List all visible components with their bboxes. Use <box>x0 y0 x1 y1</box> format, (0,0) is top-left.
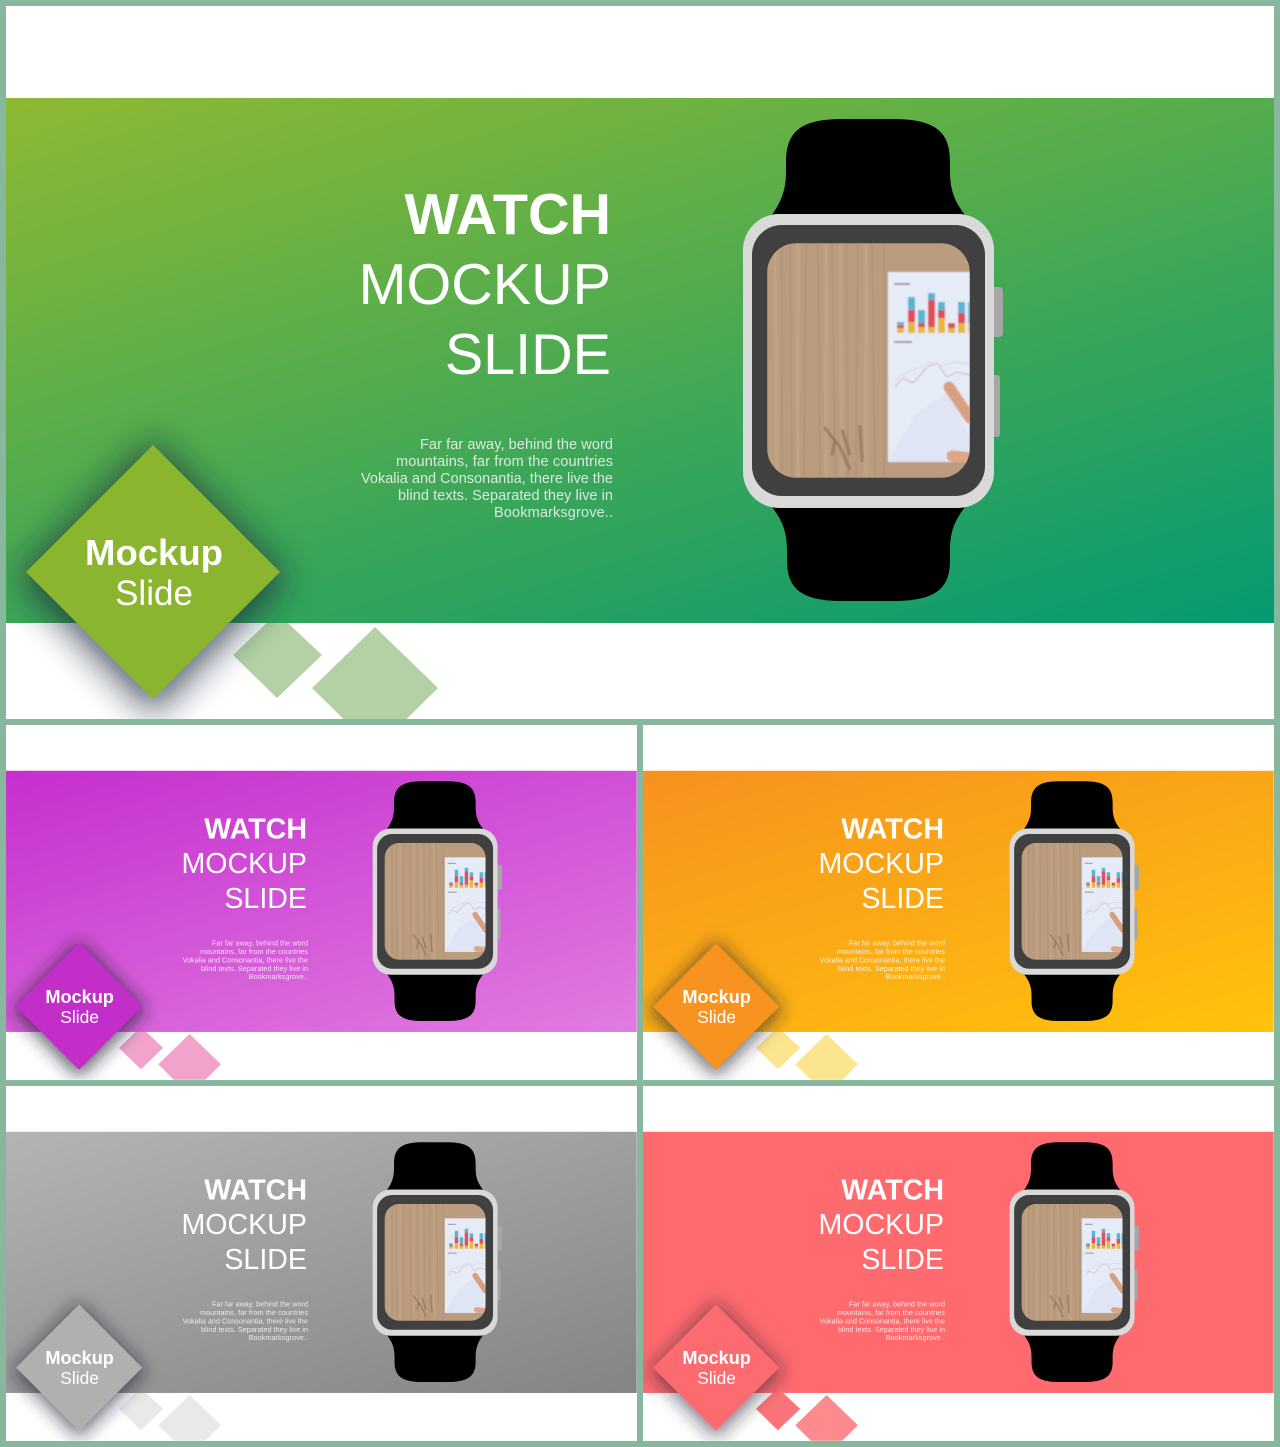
large decorative diamond <box>795 1395 858 1447</box>
panel: orange slide <box>643 771 1274 1095</box>
description text: blind texts. Separated they live in <box>201 1325 308 1334</box>
title: MOCKUP <box>818 848 944 880</box>
badge label <box>46 990 114 1023</box>
description text: Far far away, behind the word <box>420 437 613 453</box>
badge label <box>682 1348 751 1388</box>
title: WATCH <box>841 813 944 845</box>
badge label: Mockup <box>682 987 751 1007</box>
title: MOCKUP <box>359 253 611 317</box>
small decorative diamond <box>119 1032 164 1070</box>
description text: Vokalia and Consonantia, there live the <box>361 471 613 487</box>
title: WATCH <box>204 813 307 845</box>
badge label: Slide <box>697 1007 736 1027</box>
diamond shadow <box>12 941 146 1078</box>
description text: blind texts. Separated they live in <box>838 964 945 973</box>
title: MOCKUP <box>818 1209 944 1241</box>
smartwatch mockup <box>1010 1142 1139 1382</box>
smartwatch mockup <box>373 1142 502 1382</box>
description text: blind texts. Separated they live in <box>201 964 308 973</box>
title: SLIDE <box>445 323 611 387</box>
description text: Bookmarksgrove.. <box>886 972 945 981</box>
description text: Bookmarksgrove.. <box>494 505 613 521</box>
title: SLIDE <box>861 883 944 915</box>
badge label: Mockup <box>45 1348 114 1368</box>
badge label: Slide <box>697 1368 736 1388</box>
smartwatch mockup <box>743 119 1003 601</box>
gradient band <box>6 1132 637 1393</box>
title: MOCKUP <box>181 848 307 880</box>
panel: green hero slide <box>6 98 1274 750</box>
title <box>820 818 943 908</box>
gradient band <box>643 1132 1274 1393</box>
description text: mountains, far from the countries <box>396 454 613 470</box>
diamond shadow <box>18 440 288 716</box>
description text: Bookmarksgrove.. <box>886 1333 945 1342</box>
diamond shadow <box>649 1302 783 1439</box>
title: WATCH <box>841 1174 944 1206</box>
description text: blind texts. Separated they live in <box>398 488 613 504</box>
badge label: Slide <box>60 1007 99 1027</box>
description text: Far far away, behind the word <box>212 1299 308 1308</box>
description text: Vokalia and Consonantia, there live the <box>820 1316 945 1325</box>
large decorative diamond <box>158 1034 221 1080</box>
panel: gray slide <box>6 1132 637 1447</box>
badge label <box>87 538 222 606</box>
smartwatch mockup <box>373 781 502 1021</box>
description text: mountains, far from the countries <box>837 1308 945 1317</box>
description text: blind texts. Separated they live in <box>838 1325 945 1334</box>
panel: purple slide <box>6 771 637 1095</box>
badge label: Slide <box>60 1368 99 1388</box>
description text: Far far away, behind the word <box>212 938 308 947</box>
description text: Bookmarksgrove.. <box>249 1333 308 1342</box>
title: WATCH <box>204 1174 307 1206</box>
description text <box>183 938 308 981</box>
badge label <box>684 990 750 1023</box>
description text: Bookmarksgrove.. <box>249 972 308 981</box>
diamond shadow <box>649 941 783 1078</box>
description text <box>361 437 613 521</box>
large decorative diamond <box>795 1034 858 1080</box>
badge diamond <box>16 1304 142 1431</box>
description text <box>183 1299 308 1342</box>
title: SLIDE <box>224 883 307 915</box>
small decorative diamond <box>233 623 322 698</box>
badge label: Mockup <box>85 532 223 573</box>
title: MOCKUP <box>181 1209 307 1241</box>
gradient band <box>6 771 637 1032</box>
title: WATCH <box>404 183 611 247</box>
badge label <box>46 1350 114 1384</box>
gradient band <box>643 771 1274 1032</box>
badge diamond <box>653 1304 779 1431</box>
badge label: Mockup <box>45 987 114 1007</box>
description text: Far far away, behind the word <box>849 938 945 947</box>
panel: coral slide <box>643 1132 1274 1447</box>
title <box>184 818 306 908</box>
small decorative diamond <box>119 1393 163 1430</box>
description text: Vokalia and Consonantia, there live the <box>183 955 308 964</box>
title <box>818 1174 944 1276</box>
gradient band <box>6 98 1274 623</box>
title: SLIDE <box>224 1244 307 1276</box>
small decorative diamond <box>756 1027 800 1069</box>
smartwatch mockup <box>1010 781 1139 1021</box>
large decorative diamond <box>312 627 438 719</box>
badge diamond <box>16 943 142 1070</box>
small decorative diamond <box>756 1388 800 1430</box>
badge diamond <box>653 943 779 1070</box>
description text: mountains, far from the countries <box>200 1308 308 1317</box>
title <box>363 194 608 374</box>
large decorative diamond <box>158 1395 221 1441</box>
title <box>184 1179 306 1270</box>
description text: mountains, far from the countries <box>837 947 945 956</box>
title: SLIDE <box>861 1244 944 1276</box>
description text: mountains, far from the countries <box>200 947 308 956</box>
description text: Vokalia and Consonantia, there live the <box>183 1316 308 1325</box>
description text <box>820 938 945 981</box>
description text: Far far away, behind the word <box>849 1299 945 1308</box>
badge diamond <box>26 445 280 699</box>
description text <box>820 1299 945 1342</box>
description text: Vokalia and Consonantia, there live the <box>820 955 945 964</box>
badge label: Slide <box>115 574 193 613</box>
badge label: Mockup <box>682 1348 751 1368</box>
diamond shadow <box>12 1302 146 1439</box>
